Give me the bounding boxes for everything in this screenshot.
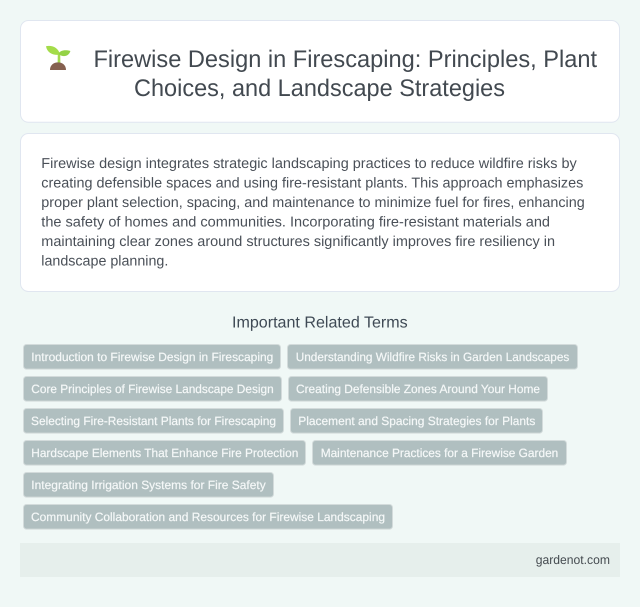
tag: wildfire risks	[288, 344, 578, 369]
tag: maintenance	[312, 440, 566, 465]
tag: hardscape	[24, 440, 306, 465]
title: Choices, and Landscape Strategies	[134, 75, 505, 102]
tag: maintenance: Maintenance Practices for a Firewise Garden	[321, 446, 558, 460]
text block: description	[41, 156, 585, 269]
tag: irrigation: Integrating Irrigation Systems for Fire Safety	[31, 478, 266, 492]
tag: placement and spacing: Placement and Spacing Strategies for Plants	[298, 414, 535, 428]
tag: selecting plants: Selecting Fire-Resistant Plants for Firescaping	[31, 414, 276, 428]
tag: community: Community Collaboration and Resources for Firewise Landscaping	[31, 510, 385, 524]
heading: important related terms: Important Related Terms	[232, 314, 408, 331]
text block: description: maintaining clear zones around structures significantly improves fire resiliency in	[41, 234, 555, 250]
tag: placement and spacing	[290, 408, 542, 433]
tag: introduction: Introduction to Firewise Design in Firescaping	[31, 350, 273, 364]
tag: introduction	[24, 344, 280, 369]
tag: selecting plants	[24, 408, 284, 433]
tag: irrigation	[24, 472, 274, 497]
title	[94, 46, 597, 102]
tag: community	[24, 504, 392, 529]
footer	[20, 543, 620, 577]
panel: related terms tags	[24, 344, 578, 529]
title: Firewise Design in Firescaping: Principles, Plant	[94, 46, 597, 73]
tag: core principles	[24, 376, 282, 401]
tag: wildfire risks: Understanding Wildfire Risks in Garden Landscapes	[296, 350, 569, 364]
tag: core principles: Core Principles of Firewise Landscape Design	[31, 382, 274, 396]
text block: description: landscape planning.	[41, 253, 168, 269]
text block: description: the safety of homes and communities. Incorporating fire-resistant materials and	[41, 214, 550, 230]
text block: description: creating defensible spaces and using fire-resistant plants. This approach emphasizes	[41, 175, 583, 191]
tag: defensible zones: Creating Defensible Zones Around Your Home	[296, 382, 540, 396]
tag: hardscape: Hardscape Elements That Enhance Fire Protection	[31, 446, 298, 460]
text block: description: proper plant selection, spacing, and maintenance to minimize fuel for fires, enhancing	[41, 195, 585, 211]
text block: description: Firewise design integrates strategic landscaping practices to reduce wildfire risks by	[41, 156, 578, 172]
tag: defensible zones	[288, 376, 548, 401]
panel: description card	[20, 134, 620, 292]
footer source text: gardenot.com	[536, 553, 610, 567]
icon: sprout	[46, 46, 70, 70]
panel: title card	[20, 20, 620, 122]
